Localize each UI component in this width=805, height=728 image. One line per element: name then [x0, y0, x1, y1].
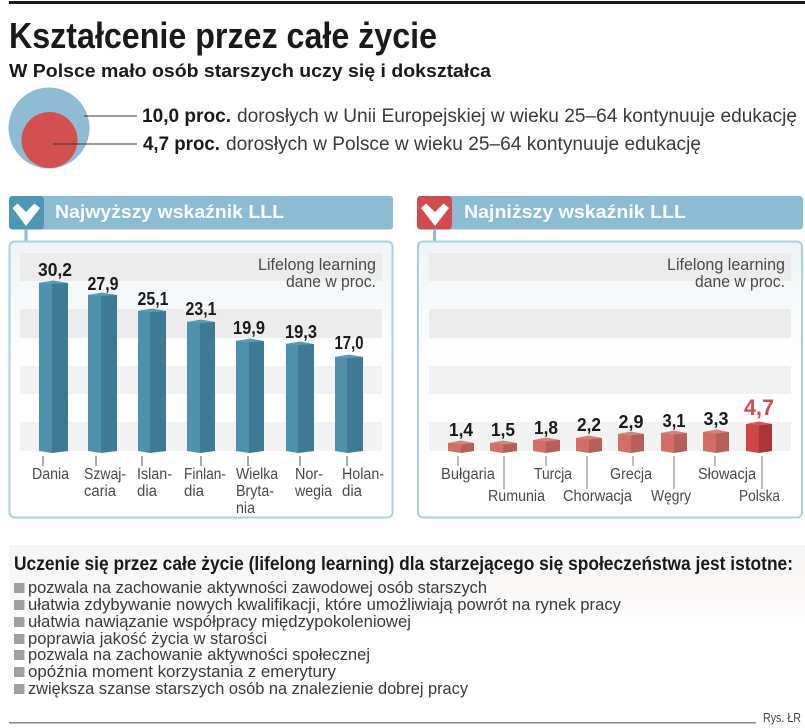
chart note: Lifelong learning — [667, 255, 785, 274]
panel: highest LLL — [9, 196, 393, 518]
country labels: highest: Holan- — [342, 466, 384, 483]
bar chart: lowest: 2,2 — [577, 415, 601, 435]
bar chart: highest: 23,1 — [186, 299, 216, 319]
header: highest — [9, 196, 393, 241]
country labels: highest — [32, 456, 384, 517]
subtitle: W Polsce mało osób starszych uczy się i dokształca — [9, 61, 492, 81]
panel: lowest LLL — [417, 196, 803, 518]
country labels: lowest: Polska — [739, 488, 780, 505]
bar chart: lowest: 1,8 — [534, 418, 558, 438]
country labels: lowest: Rumunia — [488, 488, 545, 505]
title: Kształcenie przez całe życie — [9, 15, 437, 56]
bar chart: highest: 19,9 — [233, 318, 265, 338]
bar chart: lowest: 2,9 — [618, 412, 644, 432]
chart note: dane w proc. — [695, 272, 785, 291]
bar chart: highest: 25,1 — [138, 289, 168, 309]
benefits list: opóźnia moment korzystania z emerytury — [28, 662, 336, 681]
country labels: lowest: Turcja — [534, 466, 572, 483]
bar chart: lowest: 3,3 — [704, 409, 728, 429]
country labels: highest: Dania — [32, 466, 69, 483]
country labels: lowest: Słowacja — [698, 466, 756, 483]
chart note — [258, 255, 376, 291]
country labels: lowest: Grecja — [610, 466, 652, 483]
country labels: highest: dia — [184, 483, 204, 500]
chart note: Lifelong learning — [258, 255, 376, 274]
header: lowest: Najniższy wskaźnik LLL — [464, 202, 686, 222]
benefits list: ułatwia zdybywanie nowych kwalifikacji, które umożliwiają powrót na rynek pracy — [28, 595, 621, 614]
bar chart: highest: 27,9 — [88, 274, 118, 294]
country labels: lowest: Węgry — [651, 488, 691, 505]
circle comparison: dorosłych w Unii Europejskiej w wieku 25–64 kontynuuje edukację — [237, 106, 797, 127]
country labels: highest: Islan- — [137, 466, 172, 483]
benefits list: zwiększa szanse starszych osób na znalezienie dobrej pracy — [28, 679, 468, 698]
circle comparison: 4,7 proc. — [143, 134, 220, 155]
benefits list: poprawia jakość życia w starości — [28, 629, 267, 648]
country labels: lowest: Bułgaria — [441, 466, 495, 483]
country labels: highest: Szwaj- — [84, 466, 126, 483]
benefits list: pozwala na zachowanie aktywności zawodowej osób starszych — [28, 578, 487, 597]
country labels: highest: wegia — [294, 483, 332, 500]
country labels: highest: dia — [137, 483, 157, 500]
chart note: dane w proc. — [286, 272, 376, 291]
chart note — [667, 255, 785, 291]
bar chart: highest: 19,3 — [285, 322, 317, 342]
bar chart: lowest: 4,7 — [744, 395, 774, 420]
country labels: highest: Bryta- — [236, 483, 274, 500]
country labels: lowest: Chorwacja — [563, 488, 632, 505]
country labels: highest: Nor- — [295, 466, 323, 483]
benefits list: ułatwia nawiązanie współpracy międzypokoleniowej — [28, 612, 411, 631]
circle comparison — [8, 88, 797, 168]
header: lowest — [417, 196, 803, 241]
bar chart: lowest: 3,1 — [662, 411, 686, 431]
country labels: highest: caria — [84, 483, 116, 500]
country labels: highest: Wielka — [236, 466, 278, 483]
header: highest: Najwyższy wskaźnik LLL — [55, 202, 284, 222]
bar chart: highest: 30,2 — [38, 260, 72, 280]
country labels: highest: nia — [236, 500, 255, 517]
bar chart: highest: 17,0 — [334, 333, 364, 353]
benefits list — [14, 578, 621, 698]
bar chart: lowest: 1,4 — [449, 420, 473, 440]
bar chart: lowest — [448, 395, 774, 453]
panel: lifelong learning benefits — [9, 545, 805, 698]
circle comparison: 10,0 proc. — [142, 106, 231, 127]
country labels: highest: Finlan- — [184, 466, 226, 483]
circle comparison: dorosłych w Polsce w wieku 25–64 kontynuuje edukację — [226, 134, 701, 155]
benefits list: pozwala na zachowanie aktywności społecznej — [28, 645, 370, 664]
country labels: lowest — [441, 456, 780, 505]
country labels: highest: dia — [342, 483, 362, 500]
bar chart: lowest: 1,5 — [491, 420, 515, 440]
bar chart: highest — [38, 260, 364, 453]
